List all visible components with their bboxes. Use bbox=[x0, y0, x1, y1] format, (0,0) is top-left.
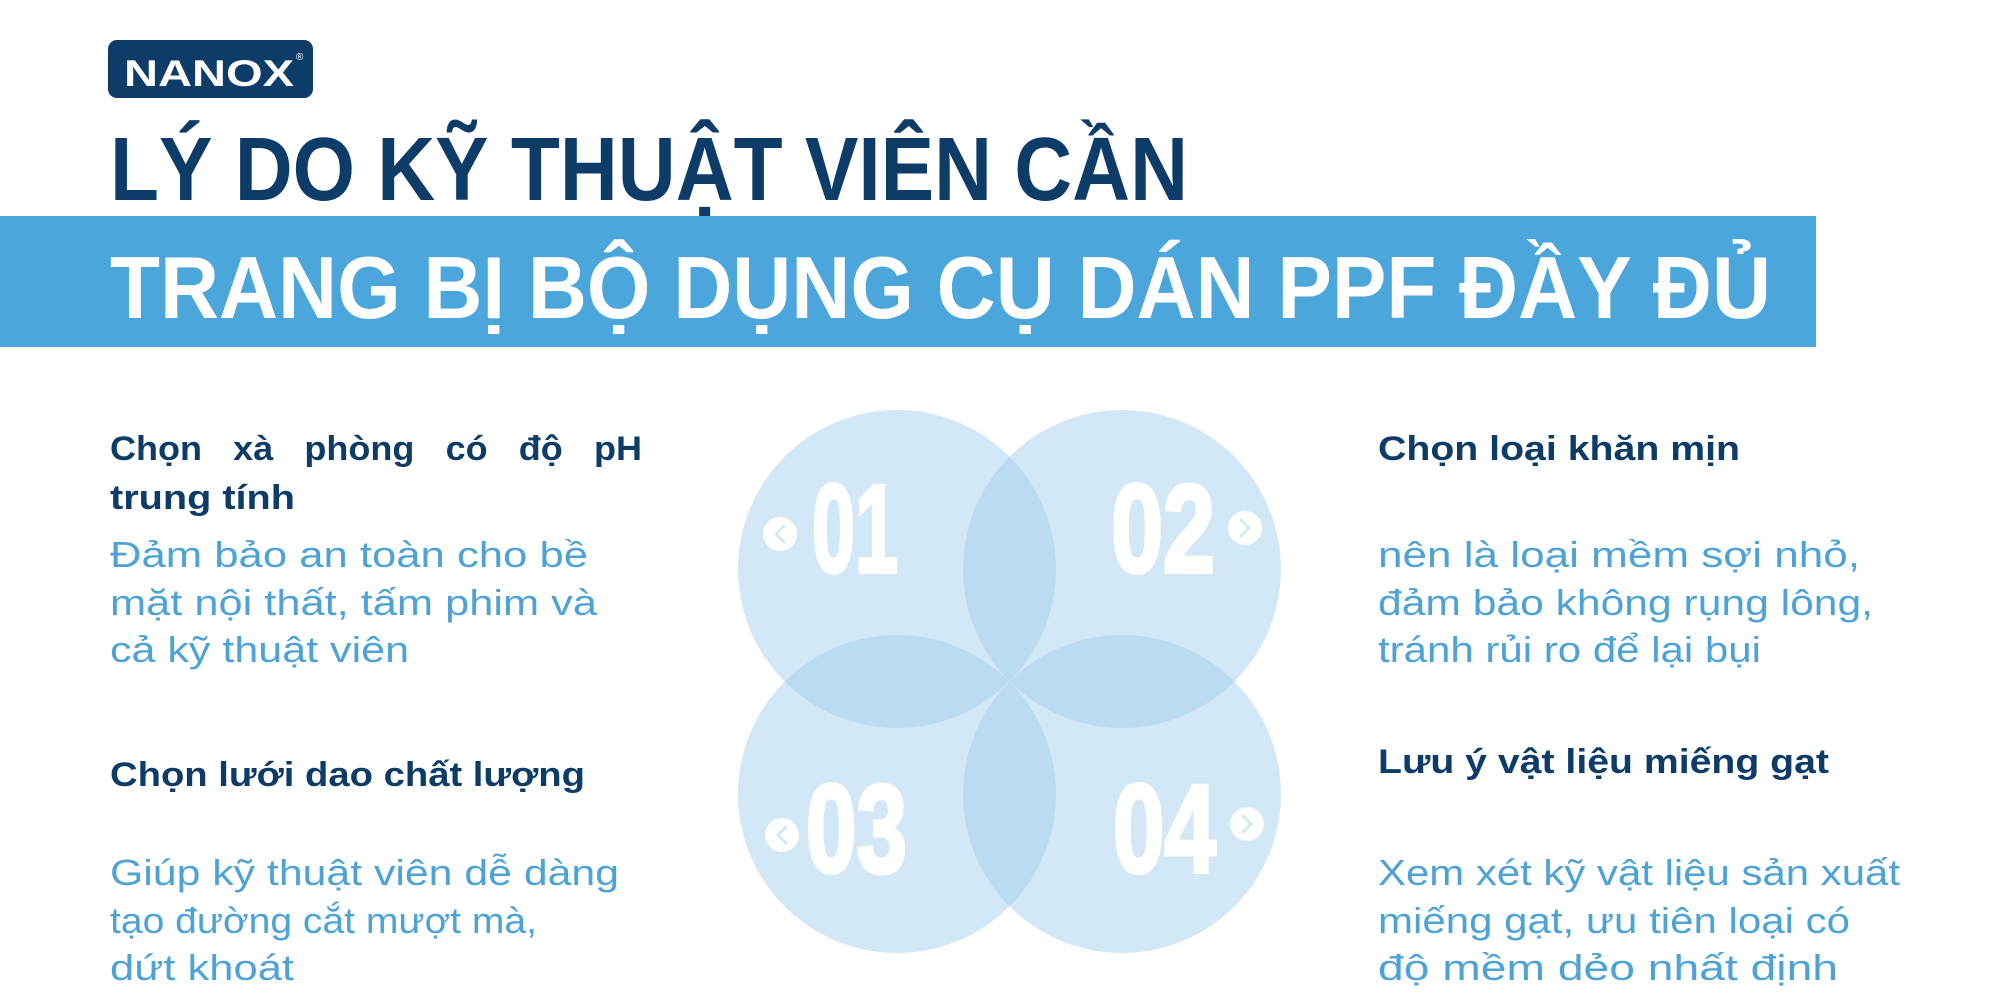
logo bbox=[108, 40, 313, 98]
number 01: 01 bbox=[812, 460, 898, 599]
circles diagram bbox=[738, 410, 1281, 953]
panel: item 1: mặt nội thất, tấm phim và bbox=[110, 582, 598, 623]
panel: item 4: Lưu ý vật liệu miếng gạt bbox=[1378, 743, 1829, 781]
number 02: 02 bbox=[1111, 460, 1215, 599]
panel: item 1 bbox=[110, 430, 642, 670]
panel: item 4: độ mềm dẻo nhất định bbox=[1378, 947, 1838, 988]
panel: item 1: trung tính bbox=[110, 479, 295, 517]
panel: item 3: Giúp kỹ thuật viên dễ dàng bbox=[110, 852, 619, 893]
title line 1: LÝ DO KỸ THUẬT VIÊN CẦN bbox=[110, 118, 1188, 220]
panel: item 4 bbox=[1378, 743, 1900, 988]
panel: item 4: Xem xét kỹ vật liệu sản xuất bbox=[1378, 852, 1900, 893]
panel: item 2: đảm bảo không rụng lông, bbox=[1378, 582, 1873, 623]
chevron icons bbox=[763, 511, 1264, 852]
panel: item 1: Đảm bảo an toàn cho bề bbox=[110, 534, 588, 575]
panel: item 1: cả kỹ thuật viên bbox=[110, 629, 409, 670]
number 04: 04 bbox=[1113, 760, 1216, 899]
panel: item 3: dứt khoát bbox=[110, 947, 294, 988]
logo: NANOX bbox=[124, 53, 294, 94]
panel: item 4: miếng gạt, ưu tiên loại có bbox=[1378, 900, 1850, 941]
panel: item 2: nên là loại mềm sợi nhỏ, bbox=[1378, 534, 1860, 575]
panel: item 2: tránh rủi ro để lại bụi bbox=[1378, 629, 1761, 670]
panel: item 3 bbox=[110, 756, 619, 988]
number 03: 03 bbox=[806, 760, 907, 899]
title band bbox=[0, 216, 1816, 347]
panel: item 2: Chọn loại khăn mịn bbox=[1378, 430, 1740, 468]
panel: item 3: tạo đường cắt mượt mà, bbox=[110, 900, 537, 941]
logo: ® bbox=[296, 52, 304, 63]
panel: item 3: Chọn lưới dao chất lượng bbox=[110, 756, 585, 794]
title band: TRANG BỊ BỘ DỤNG CỤ DÁN PPF ĐẦY ĐỦ bbox=[110, 238, 1771, 337]
panel: item 1: Chọn xà phòng có độ pH bbox=[110, 430, 642, 468]
panel: item 2 bbox=[1378, 430, 1873, 670]
